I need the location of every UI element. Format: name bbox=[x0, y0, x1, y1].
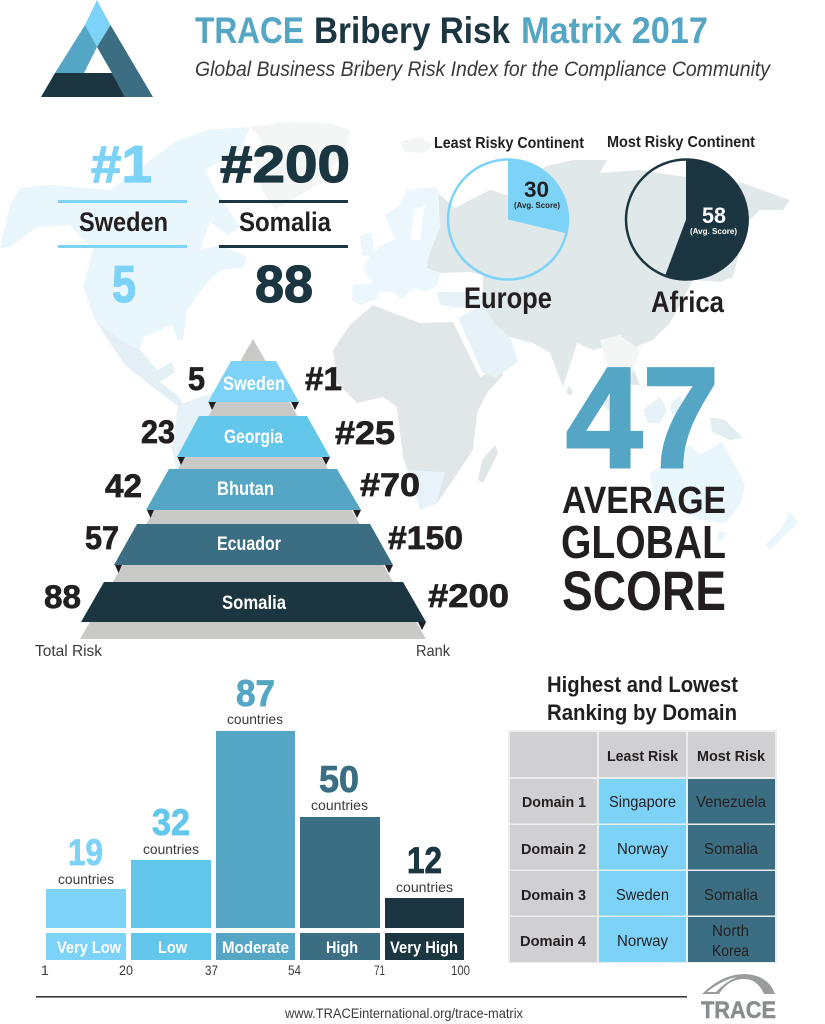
pyramid tier: Ecuador: 57 bbox=[85, 520, 119, 556]
pyramid tier: Bhutan: #70 bbox=[360, 467, 420, 503]
bar: very low: 19 bbox=[68, 832, 103, 873]
bar: high: High bbox=[326, 938, 358, 957]
table: ranking by domain: Domain 1 bbox=[522, 794, 586, 811]
table: ranking by domain: Least Risk bbox=[607, 748, 679, 765]
table heading bbox=[547, 672, 739, 725]
average global score: SCORE bbox=[562, 559, 726, 622]
pyramid tier: Georgia: Georgia bbox=[224, 427, 283, 448]
pie: least risky continent bbox=[434, 135, 585, 315]
pyramid tier: Bhutan: Bhutan bbox=[217, 479, 274, 500]
best country name: Sweden bbox=[79, 207, 168, 237]
table: ranking by domain: North bbox=[712, 923, 749, 940]
score scale: 100 bbox=[451, 962, 470, 978]
pie: most risky continent bbox=[607, 134, 756, 319]
pyramid tier: Somalia: #200 bbox=[428, 578, 509, 614]
subtitle: Global Business Bribery Risk Index for the Compliance Community bbox=[195, 58, 771, 81]
worst country rank: #200 bbox=[220, 136, 350, 194]
pyramid chart bbox=[44, 339, 509, 639]
score scale: 20 bbox=[119, 962, 133, 978]
bar: very high: Very High bbox=[390, 938, 458, 957]
pie: least risky continent: (Avg. Score) bbox=[514, 200, 560, 210]
pie: most risky continent: Most Risky Continent bbox=[607, 134, 756, 151]
panel: best and worst ranked countries bbox=[58, 136, 350, 314]
score scale: 71 bbox=[374, 962, 385, 978]
average global score bbox=[561, 339, 726, 622]
bar: very high bbox=[385, 840, 464, 960]
bar: low bbox=[131, 802, 211, 960]
table: ranking by domain: Somalia bbox=[704, 841, 758, 858]
pie: most risky continent: Africa bbox=[651, 286, 724, 319]
footer url: www.TRACEinternational.org/trace-matrix bbox=[284, 1005, 523, 1021]
title: TRACE bbox=[195, 10, 304, 51]
table heading: Ranking by Domain bbox=[547, 700, 737, 725]
pyramid tier: Sweden bbox=[188, 361, 342, 410]
background world map bbox=[0, 122, 798, 600]
bar: high: countries bbox=[311, 797, 368, 813]
title bbox=[195, 10, 708, 51]
pyramid tier: Bhutan bbox=[105, 467, 420, 518]
bar chart: countries by risk level bbox=[41, 673, 470, 978]
bar: moderate: Moderate bbox=[222, 938, 289, 957]
logo triangle bbox=[41, 0, 153, 97]
pyramid tier: Sweden: 5 bbox=[188, 361, 205, 397]
footer rule bbox=[36, 996, 687, 998]
table: ranking by domain: Sweden bbox=[616, 887, 669, 904]
pyramid tier: Georgia bbox=[141, 414, 395, 465]
pyramid tier: Sweden: #1 bbox=[305, 361, 342, 397]
bar: high: 50 bbox=[319, 759, 359, 800]
score scale: 1 bbox=[41, 962, 49, 978]
table: ranking by domain: Norway bbox=[617, 933, 668, 950]
bar: high bbox=[300, 759, 380, 960]
best country rank: #1 bbox=[91, 136, 152, 194]
table: ranking by domain: Domain 4 bbox=[520, 933, 587, 950]
pyramid tier: Ecuador: #150 bbox=[388, 520, 463, 556]
table: ranking by domain: Somalia bbox=[704, 887, 758, 904]
table: ranking by domain: Norway bbox=[617, 841, 668, 858]
best country rank: 5 bbox=[112, 256, 136, 314]
table: ranking by domain: Korea bbox=[712, 943, 749, 960]
average global score: GLOBAL bbox=[561, 516, 726, 568]
bar: moderate: 87 bbox=[236, 673, 275, 714]
table: ranking by domain bbox=[508, 730, 777, 963]
pyramid tier: Sweden: Sweden bbox=[223, 374, 285, 395]
bar: low: Low bbox=[158, 938, 188, 957]
pie: least risky continent: Europe bbox=[464, 282, 552, 315]
bar: very low: Very Low bbox=[57, 938, 122, 957]
table heading: Highest and Lowest bbox=[547, 672, 739, 697]
worst country rank bbox=[219, 136, 350, 314]
best country rank bbox=[58, 136, 187, 314]
pyramid axis label: rank: Rank bbox=[416, 643, 451, 660]
worst country rank: 88 bbox=[255, 256, 313, 314]
worst country name: Somalia bbox=[239, 207, 332, 237]
bar: moderate bbox=[216, 673, 295, 960]
TRACE footer logo: TRACE bbox=[701, 997, 776, 1024]
table: ranking by domain: Domain 3 bbox=[521, 887, 586, 904]
pie: least risky continent: 30 bbox=[524, 177, 549, 202]
bar: very high: countries bbox=[396, 879, 453, 895]
pie: least risky continent: Least Risky Continent bbox=[434, 135, 585, 152]
bar: very high: 12 bbox=[407, 840, 442, 881]
table: ranking by domain: Domain 2 bbox=[521, 841, 586, 858]
pyramid tier: Somalia: Somalia bbox=[222, 593, 286, 614]
score scale: 54 bbox=[288, 962, 301, 978]
table: ranking by domain: Singapore bbox=[609, 794, 676, 811]
bar: moderate: countries bbox=[227, 711, 283, 727]
pyramid tier: Georgia: #25 bbox=[335, 415, 395, 451]
pyramid tier: Somalia: 88 bbox=[44, 579, 81, 615]
pyramid tier: Ecuador: Ecuador bbox=[217, 534, 281, 555]
pyramid axis label: total risk: Total Risk bbox=[35, 643, 103, 660]
table: ranking by domain: Most Risk bbox=[697, 748, 766, 765]
pyramid tier: Georgia: 23 bbox=[141, 414, 175, 450]
pie: most risky continent: (Avg. Score) bbox=[690, 226, 737, 236]
bar: very low: countries bbox=[58, 871, 114, 887]
title: Matrix 2017 bbox=[521, 10, 708, 51]
pyramid tier: Bhutan: 42 bbox=[105, 468, 142, 504]
TRACE footer logo bbox=[701, 974, 776, 1024]
bar: low: countries bbox=[143, 841, 199, 857]
score scale bbox=[41, 962, 470, 978]
title: Bribery Risk bbox=[314, 10, 510, 51]
pyramid tier: Somalia bbox=[44, 578, 509, 630]
average global score: 47 bbox=[566, 339, 719, 498]
pie: most risky continent: 58 bbox=[702, 203, 726, 228]
bar: very low bbox=[46, 832, 126, 960]
pyramid tier: Ecuador bbox=[85, 520, 463, 573]
table: ranking by domain: Venezuela bbox=[696, 794, 766, 811]
score scale: 37 bbox=[205, 962, 218, 978]
average global score: AVERAGE bbox=[562, 480, 726, 522]
bar: low: 32 bbox=[152, 802, 190, 843]
